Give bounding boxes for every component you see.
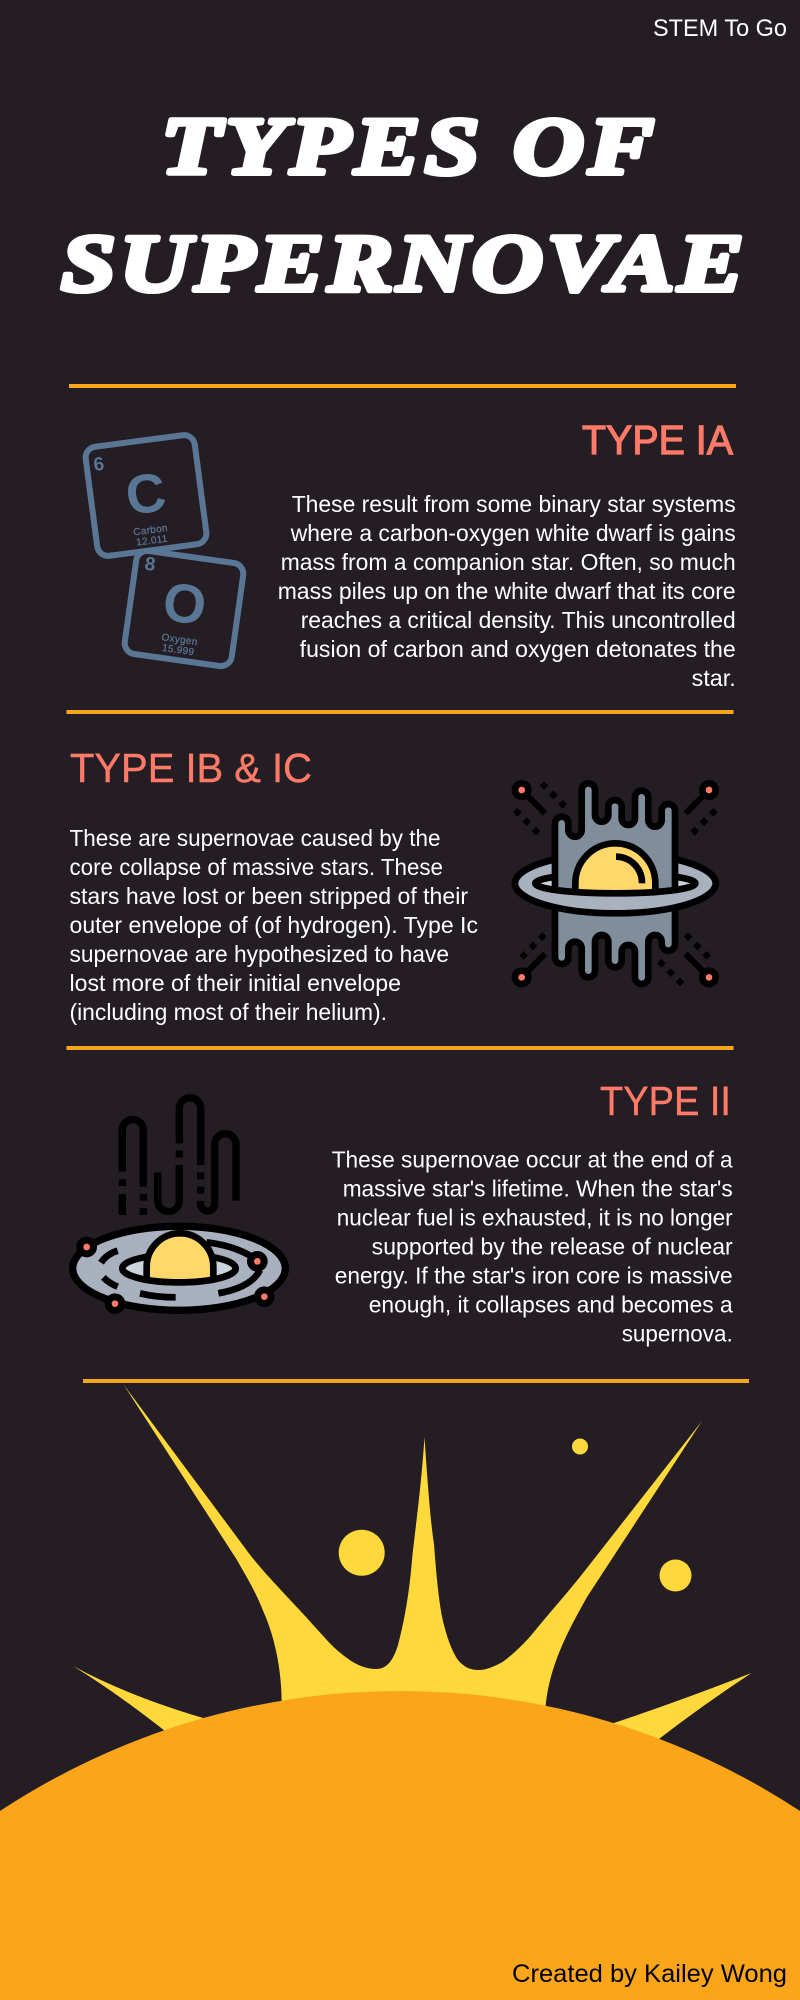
text block: type Ib and Ic: These are supernovae caused by the: [70, 825, 440, 851]
text block: type Ib and Ic: [70, 825, 478, 1025]
icon: oxygen tile: O: [159, 570, 210, 637]
title: SUPERNOVAE: [61, 217, 744, 309]
text block: type II: supported by the release of nuclear: [372, 1234, 733, 1260]
star surface: [0, 1691, 800, 2000]
text block: type II: massive star's lifetime. When the star's: [343, 1176, 733, 1202]
text block: type Ia: These result from some binary star systems: [292, 491, 736, 517]
icon: oxygen tile: Oxygen: [161, 632, 198, 648]
lower plasma: [555, 907, 675, 984]
text block: type II: These supernovae occur at the end of a: [332, 1147, 733, 1173]
text block: type Ia: mass from a companion star. Often, so much: [281, 549, 736, 575]
text block: type Ib and Ic: supernovae are hypothesized to have: [70, 941, 449, 967]
title: TYPES OF: [161, 100, 654, 192]
star core: [122, 1233, 236, 1282]
icon: carbon tile: 6: [92, 454, 106, 476]
text block: type Ia: fusion of carbon and oxygen detonates the: [300, 636, 736, 662]
text block: type II: [332, 1147, 733, 1347]
accretion disc: [73, 1226, 285, 1310]
plasma wisps: [122, 1098, 236, 1215]
heading: type II: TYPE II: [600, 1078, 731, 1124]
explosion rays: [73, 1384, 752, 1742]
heading: type Ib and Ic: TYPE IB & IC: [70, 745, 312, 791]
text block: type Ia: mass piles up on the white dwarf that its core: [278, 578, 736, 604]
icon: oxygen tile: [123, 549, 245, 668]
text block: type II: enough, it collapses and becomes a: [369, 1292, 733, 1318]
upper plasma: [555, 783, 675, 893]
debris: [339, 1438, 692, 1592]
text block: type Ia: [278, 491, 736, 691]
orbit dashes: [101, 1242, 260, 1297]
panel: type Ib and Ic: [70, 745, 719, 1025]
text block: type Ib and Ic: stars have lost or been stripped of their: [70, 883, 468, 909]
ring front: [515, 883, 716, 913]
star core: [575, 843, 655, 893]
icon: collapsing star with ring: [512, 780, 719, 987]
heading: type Ia: TYPE IA: [582, 417, 734, 463]
text block: type Ib and Ic: core collapse of massive stars. These: [70, 854, 443, 880]
title: [61, 100, 744, 309]
ring back: [515, 853, 716, 913]
icon: oxygen tile: 8: [143, 554, 157, 576]
icon: carbon tile: [84, 434, 208, 557]
panel: type Ia: [84, 417, 736, 691]
orbiting bodies: [76, 1237, 275, 1314]
icon: star with accretion disc and plasma wisps: [73, 1098, 285, 1314]
text block: type Ib and Ic: lost more of their initial envelope: [70, 970, 401, 996]
icon: carbon tile: Carbon: [133, 523, 169, 538]
text block: type II: supernova.: [622, 1321, 733, 1347]
text block: type II: energy. If the star's iron core is massive: [335, 1263, 733, 1289]
icon: carbon tile: 12.011: [136, 534, 169, 549]
illustration: supernova explosion: [0, 1384, 800, 2000]
connector pins: [512, 780, 719, 987]
icon: carbon and oxygen periodic tiles: [84, 434, 245, 668]
brand label: STEM To Go: [653, 15, 787, 42]
icon: carbon tile: C: [122, 460, 169, 527]
panel: type II: [73, 1078, 733, 1347]
text block: type Ia: star.: [692, 665, 736, 691]
icon: oxygen tile: 15.999: [161, 643, 195, 658]
text block: type Ia: where a carbon-oxygen white dwarf is gains: [290, 520, 736, 546]
text block: type Ib and Ic: outer envelope of (of hydrogen). Type Ic: [70, 912, 478, 938]
text block: type Ib and Ic: (including most of their helium).: [70, 999, 387, 1025]
text block: type Ia: reaches a critical density. This uncontrolled: [301, 607, 736, 633]
author credit: Created by Kailey Wong: [512, 1960, 787, 1988]
text block: type II: nuclear fuel is exhausted, it is no longer: [337, 1205, 733, 1231]
